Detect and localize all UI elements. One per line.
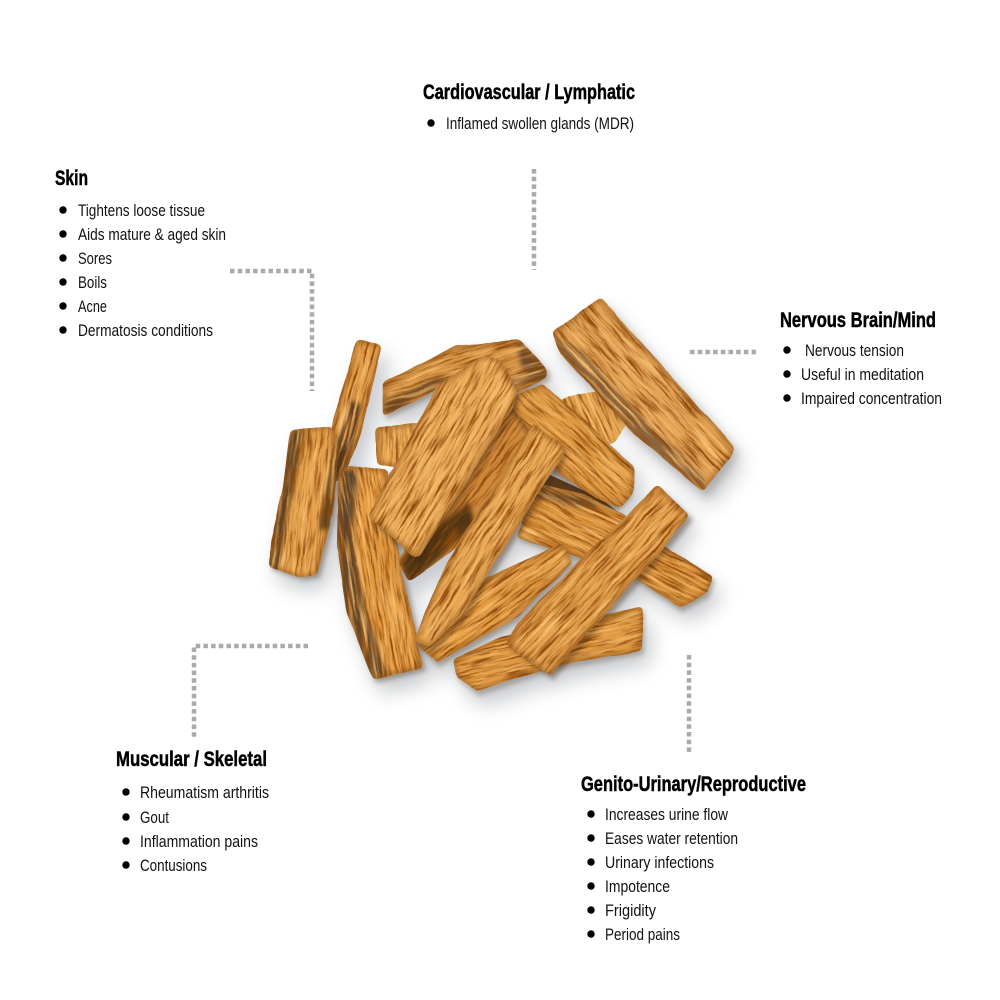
text block: Genito-Urinary/Reproductive	[581, 773, 806, 944]
heading: Muscular / Skeletal	[116, 748, 267, 771]
heading: Cardiovascular / Lymphatic	[423, 81, 635, 104]
text block: Cardiovascular / Lymphatic	[423, 81, 635, 133]
stick G	[561, 392, 626, 444]
list: Nervous tension	[805, 341, 904, 360]
dotted connector: muscular	[194, 646, 308, 737]
list	[59, 201, 226, 340]
list	[122, 783, 269, 875]
stick L	[518, 484, 717, 614]
list: Period pains	[605, 925, 680, 944]
text block: Muscular / Skeletal	[116, 748, 269, 875]
list: Aids mature & aged skin	[78, 225, 226, 244]
list: Gout	[140, 808, 169, 827]
list	[783, 341, 942, 408]
heading: Genito-Urinary/Reproductive	[581, 773, 806, 796]
heading: Nervous Brain/Mind	[780, 309, 936, 332]
stick F	[399, 407, 529, 580]
list: Acne	[78, 297, 107, 316]
list: Boils	[78, 273, 107, 292]
text block: Nervous Brain/Mind	[780, 309, 942, 408]
icon: palo santo wood sticks pile	[267, 298, 749, 713]
list: Impotence	[605, 877, 670, 896]
list: Frigidity	[605, 901, 656, 920]
gap shade between sticks	[535, 468, 622, 515]
list: Rheumatism arthritis	[140, 783, 269, 802]
list: Inflammation pains	[140, 832, 258, 851]
list: Eases water retention	[605, 829, 738, 848]
stick B	[269, 426, 344, 582]
stick J	[552, 298, 740, 499]
stick D	[382, 339, 552, 422]
list: Dermatosis conditions	[78, 321, 213, 340]
stick I	[510, 384, 636, 512]
stick K	[414, 425, 570, 654]
stick M	[418, 544, 575, 668]
stick N	[452, 607, 648, 698]
list: Inflamed swollen glands (MDR)	[446, 114, 634, 133]
text block: Skin	[55, 167, 226, 340]
list	[587, 805, 738, 944]
stick H	[369, 356, 522, 560]
list: Increases urine flow	[605, 805, 729, 824]
dotted connector: skin	[230, 271, 312, 391]
list: Sores	[78, 249, 112, 268]
stick A	[332, 340, 381, 481]
list: Useful in meditation	[801, 365, 924, 384]
dotted connector: genito-urinary	[687, 655, 691, 754]
dotted connector: cardiovascular	[532, 169, 536, 270]
stick E	[375, 423, 418, 468]
dotted connector: nervous	[690, 350, 757, 354]
stick O	[506, 486, 695, 682]
heading: Skin	[55, 167, 88, 190]
list: Contusions	[140, 856, 207, 875]
list: Impaired concentration	[801, 389, 942, 408]
list: Tightens loose tissue	[78, 201, 205, 220]
list: Urinary infections	[605, 853, 714, 872]
ground shadow	[277, 311, 743, 706]
stick C	[337, 466, 428, 685]
